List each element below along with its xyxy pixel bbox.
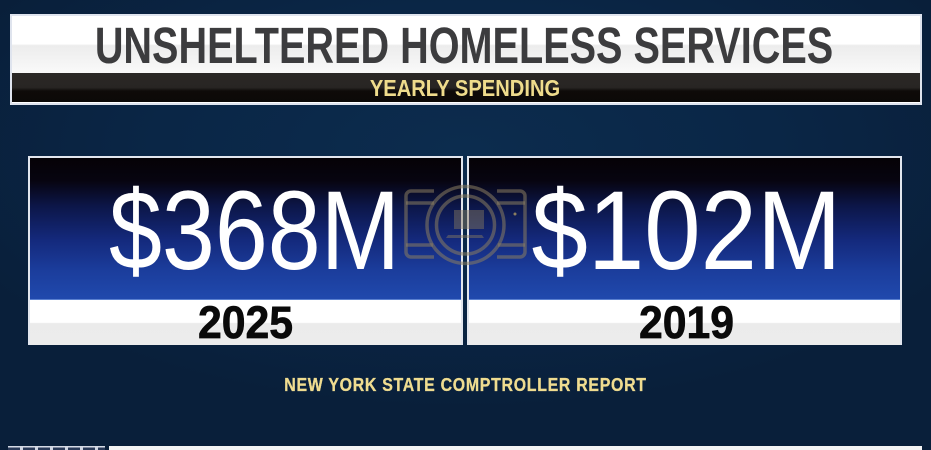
bottom ticker logo bbox=[8, 446, 105, 450]
bottom ticker bar bbox=[109, 446, 922, 450]
title: UNSHELTERED HOMELESS SERVICES bbox=[95, 17, 833, 74]
year strip 2019 bbox=[469, 300, 900, 345]
amount 2025: $368M bbox=[108, 168, 400, 293]
panel: 2019 spending bbox=[467, 156, 902, 345]
amount 2019: $102M bbox=[531, 168, 841, 293]
blue panel 2025 bbox=[30, 158, 461, 300]
subtitle: YEARLY SPENDING bbox=[370, 74, 560, 100]
year strip 2025 bbox=[30, 300, 461, 345]
source note: NEW YORK STATE COMPTROLLER REPORT bbox=[284, 375, 647, 395]
subtitle bar bbox=[12, 73, 920, 102]
year 2025: 2025 bbox=[198, 297, 293, 348]
year 2019: 2019 bbox=[638, 297, 734, 348]
icon: camera watermark bbox=[404, 184, 527, 266]
title banner bbox=[10, 14, 922, 105]
panel: 2025 spending bbox=[28, 156, 463, 345]
blue panel 2019 bbox=[469, 158, 900, 300]
